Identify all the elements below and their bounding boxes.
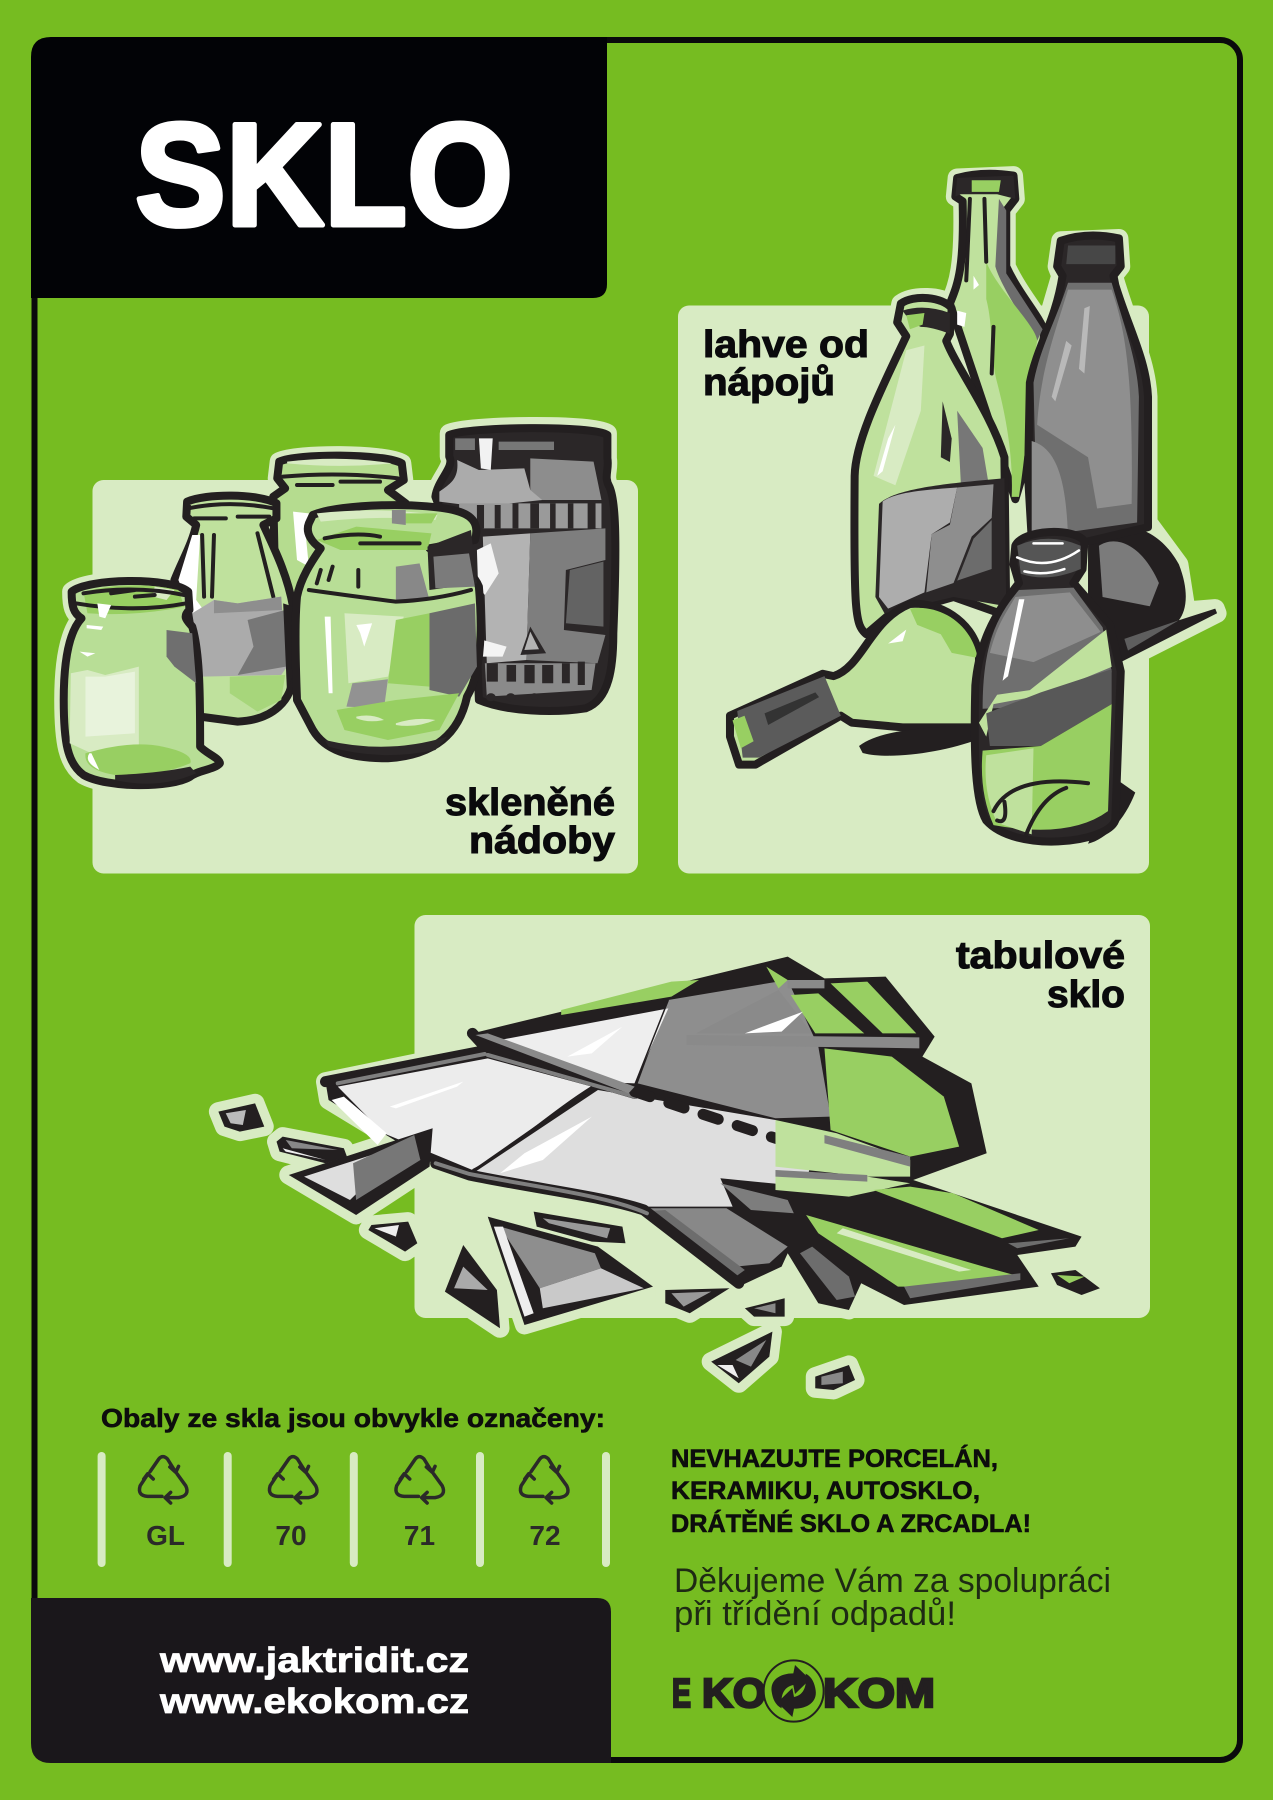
jar: front left bbox=[64, 581, 220, 785]
header block bbox=[31, 37, 607, 298]
text: web addresses bbox=[159, 1641, 469, 1721]
logo: EKOKOM bbox=[672, 1660, 935, 1722]
bottle: lying bbox=[730, 604, 979, 765]
icon: recycling triangle GL bbox=[139, 1457, 187, 1503]
bottle: tall green back bbox=[950, 174, 1044, 499]
text: thanks bbox=[674, 1562, 1111, 1633]
recycling codes bbox=[98, 1452, 610, 1567]
shard: left triangle bbox=[289, 1128, 433, 1215]
logo: EKOKOM: KOM bbox=[823, 1670, 935, 1716]
text: warning bbox=[671, 1444, 1031, 1538]
text: web addresses: www.jaktridit.cz bbox=[159, 1641, 469, 1680]
illustration: broken sheet glass bbox=[218, 957, 1100, 1390]
code labels: GL bbox=[146, 1520, 185, 1551]
text: web addresses: www.ekokom.cz bbox=[159, 1682, 469, 1721]
text: warning: NEVHAZUJTE PORCELÁN, bbox=[671, 1444, 998, 1473]
footer block bbox=[31, 1598, 611, 1763]
label: lahve od nápojů bbox=[703, 324, 869, 404]
illustration: bottles bbox=[730, 174, 1217, 848]
glass: main panes bbox=[326, 957, 1082, 1310]
jar: back centre bbox=[273, 456, 406, 687]
label: tabulové sklo bbox=[956, 935, 1125, 1016]
label: lahve od nápojů: nápojů bbox=[703, 362, 835, 404]
code labels: 70 bbox=[275, 1520, 307, 1551]
code labels: 71 bbox=[404, 1520, 435, 1551]
panel: bottles bbox=[678, 306, 1149, 874]
label: skleněné nádoby: skleněné bbox=[445, 782, 615, 824]
title: SKLO bbox=[135, 93, 513, 256]
logo: EKOKOM: E bbox=[672, 1670, 691, 1716]
bottle: large green left bbox=[854, 298, 1006, 634]
text: warning: KERAMIKU, AUTOSKLO, bbox=[671, 1477, 980, 1505]
panel: sheet glass bbox=[414, 915, 1150, 1318]
bottle: front standing bbox=[975, 532, 1135, 844]
icon: recycling triangle 72 bbox=[520, 1457, 568, 1503]
text: thanks: při třídění odpadů! bbox=[674, 1595, 956, 1633]
label: skleněné nádoby bbox=[445, 782, 615, 862]
icon: green dot bbox=[764, 1660, 824, 1722]
icon: recycling triangle 70 bbox=[269, 1457, 317, 1503]
label: tabulové sklo: tabulové bbox=[956, 935, 1125, 977]
code labels bbox=[146, 1520, 561, 1551]
jar: front centre bbox=[296, 505, 481, 758]
text: packaging marks heading: Obaly ze skla jsou obvykle označeny: bbox=[101, 1403, 605, 1433]
shadow: under bottles bbox=[859, 725, 979, 756]
label: lahve od nápojů: lahve od bbox=[703, 324, 869, 366]
bottle: dark right bbox=[1028, 235, 1148, 569]
shadow: dark arc behind bbox=[1088, 527, 1217, 662]
text: thanks: Děkujeme Vám za spolupráci bbox=[674, 1562, 1111, 1600]
jar: back middle bbox=[174, 496, 293, 722]
label: tabulové sklo: sklo bbox=[1047, 974, 1125, 1016]
code labels: 72 bbox=[529, 1520, 561, 1551]
text: warning: DRÁTĚNÉ SKLO A ZRCADLA! bbox=[671, 1508, 1031, 1538]
jar: dark back right bbox=[435, 428, 615, 711]
panel: jars bbox=[92, 480, 638, 874]
label: skleněné nádoby: nádoby bbox=[469, 820, 615, 862]
illustration: glass jars bbox=[64, 426, 615, 785]
icon: recycling triangle 71 bbox=[396, 1457, 444, 1503]
shards: small fragments bbox=[218, 1103, 1100, 1390]
logo: EKOKOM: KO bbox=[702, 1670, 766, 1716]
